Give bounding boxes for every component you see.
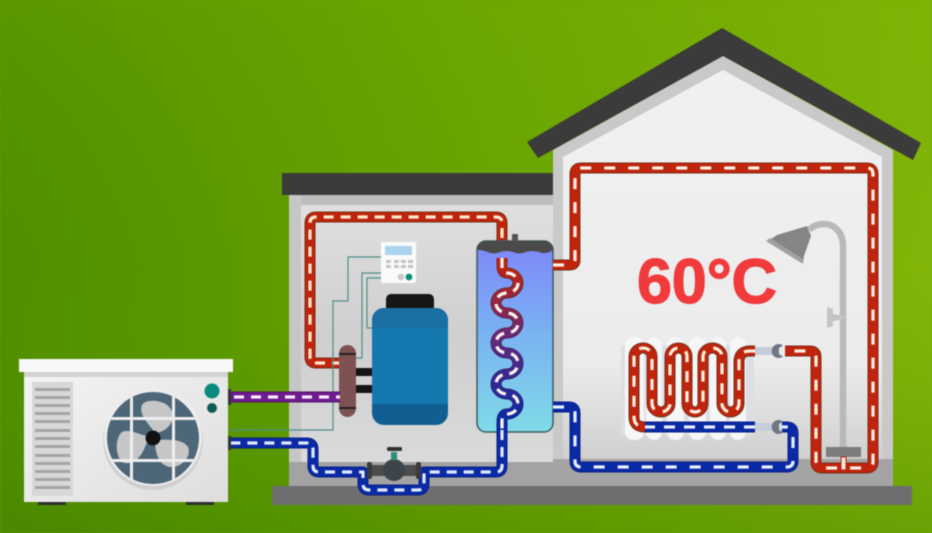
pipe ports xyxy=(228,389,231,450)
ground slab xyxy=(272,486,912,505)
control wires xyxy=(229,257,381,430)
radiator valves xyxy=(755,344,783,434)
hot water pipe: house loop xyxy=(553,168,873,468)
roof xyxy=(527,28,921,160)
radiator coil: return xyxy=(645,422,755,432)
radiator coil: heated xyxy=(634,348,755,427)
cold return pipe xyxy=(229,430,502,490)
water tank xyxy=(477,234,553,432)
blue compressor tank xyxy=(372,294,448,425)
fan xyxy=(103,388,203,490)
heat exchanger xyxy=(339,345,356,417)
indicator lights xyxy=(204,384,220,398)
shower xyxy=(766,224,861,470)
main house xyxy=(527,28,921,486)
fan grille xyxy=(110,396,196,480)
outdoor heat pump unit xyxy=(19,359,233,505)
refrigerant pipe xyxy=(229,392,340,402)
feet xyxy=(38,502,214,505)
wall controller xyxy=(381,242,416,283)
connectors xyxy=(356,368,372,393)
fan blades xyxy=(117,401,189,467)
temperature label: 60°C xyxy=(637,247,777,317)
top cover xyxy=(19,359,233,372)
coil in tank xyxy=(496,258,518,432)
vent xyxy=(32,382,73,496)
annex building xyxy=(282,173,555,486)
hot water pipe: annex loop xyxy=(310,217,502,363)
radiator xyxy=(621,337,783,440)
cold water pipe: house loop xyxy=(553,407,793,467)
valve xyxy=(367,447,421,481)
